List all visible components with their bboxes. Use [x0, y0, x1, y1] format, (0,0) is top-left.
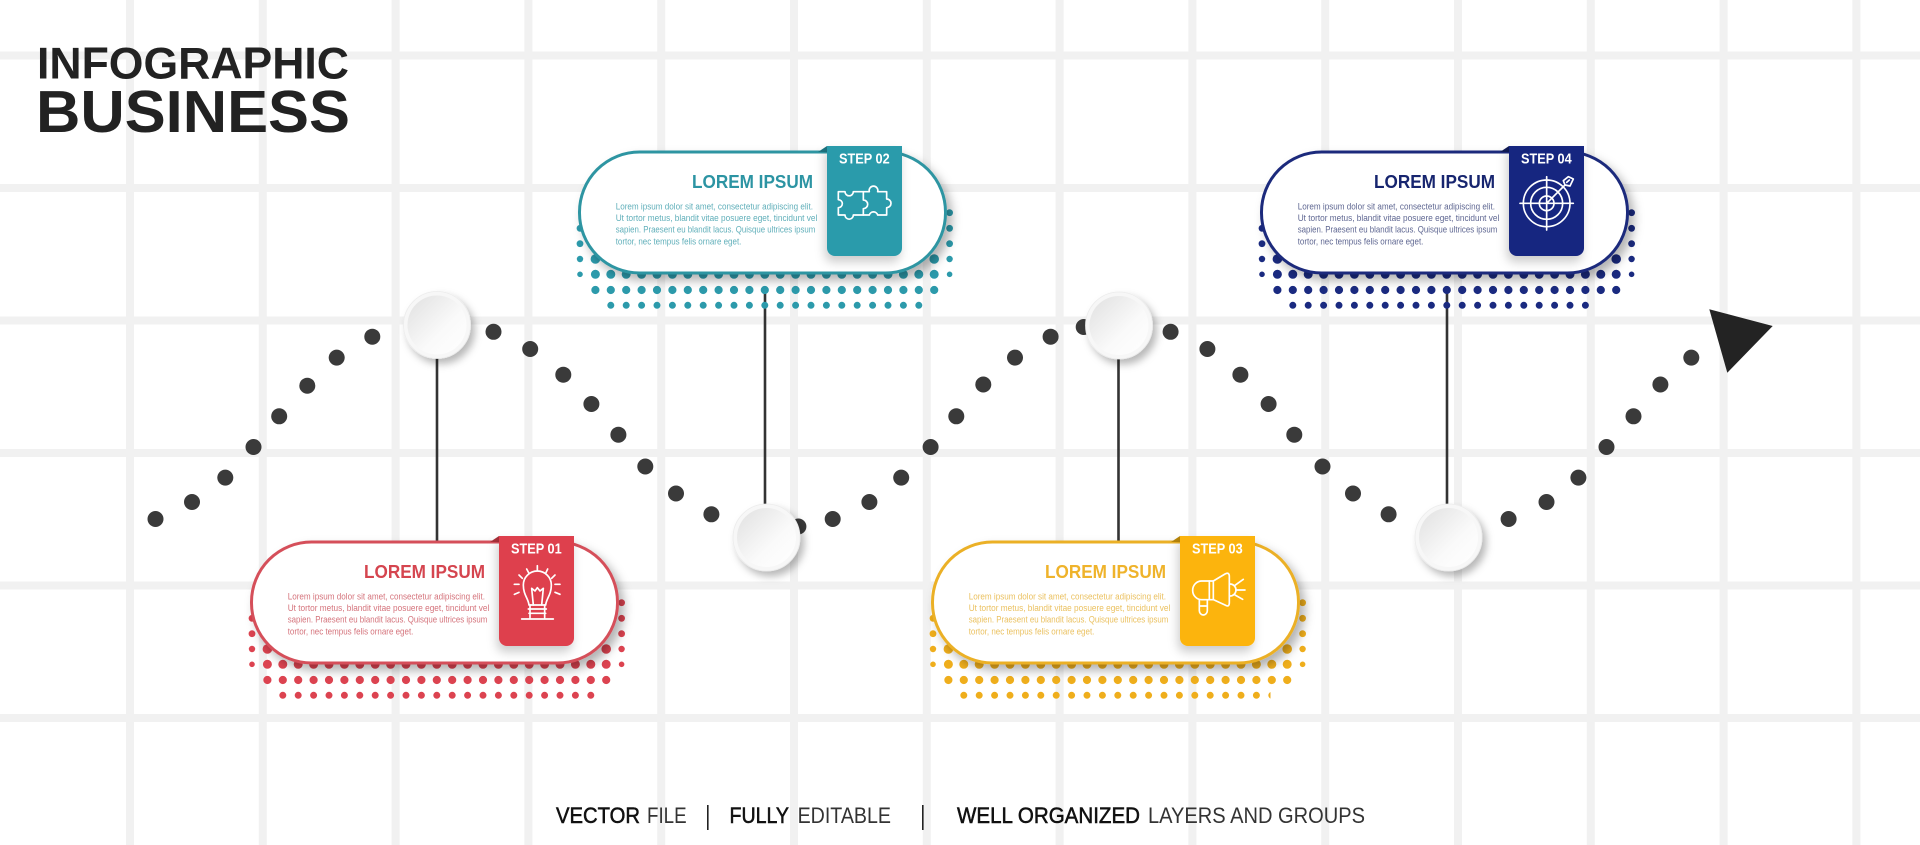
- step label: STEP 02: [839, 152, 890, 168]
- tab fold: [1171, 536, 1180, 542]
- heading: LOREM IPSUM: [364, 561, 485, 582]
- arrow head: [1709, 309, 1773, 373]
- pill outline: [580, 152, 946, 273]
- footer tagline: [556, 803, 1365, 830]
- body text: [1298, 201, 1499, 247]
- body text: sapien. Praesent eu blandit lacus. Quisque ultrices ipsum: [1298, 225, 1497, 236]
- connector lines: [437, 291, 1447, 544]
- body text: Lorem ipsum dolor sit amet, consectetur adipiscing elit.: [969, 591, 1166, 602]
- body text: tortor, nec tempus felis ornare eget.: [288, 626, 413, 637]
- body text: Ut tortor metus, blandit vitae posuere eget, tincidunt vel: [1298, 213, 1499, 224]
- body text: sapien. Praesent eu blandit lacus. Quisque ultrices ipsum: [969, 615, 1168, 626]
- body text: Lorem ipsum dolor sit amet, consectetur adipiscing elit.: [1298, 201, 1495, 212]
- halftone dots: [249, 599, 625, 695]
- footer tagline: LAYERS AND GROUPS: [1148, 803, 1365, 828]
- heading: LOREM IPSUM: [1045, 561, 1166, 582]
- body text: tortor, nec tempus felis ornare eget.: [1298, 236, 1423, 247]
- panel: step 02: [577, 146, 953, 305]
- step tab: [1509, 146, 1584, 256]
- footer tagline: FULLY: [730, 803, 789, 828]
- footer tagline: VECTOR: [556, 803, 640, 828]
- footer tagline: FILE: [647, 803, 687, 828]
- step label: STEP 03: [1192, 542, 1243, 558]
- node circle 1: [404, 292, 470, 358]
- node circle 2: [733, 504, 800, 571]
- heading: LOREM IPSUM: [692, 171, 813, 192]
- footer tagline: WELL ORGANIZED: [957, 803, 1140, 828]
- body text: [616, 201, 817, 247]
- title: [36, 39, 350, 145]
- panel: step 03: [930, 536, 1306, 695]
- body text: [288, 591, 489, 637]
- halftone dots: [930, 599, 1306, 695]
- body text: Lorem ipsum dolor sit amet, consectetur adipiscing elit.: [616, 201, 813, 212]
- step tab: [1180, 536, 1255, 646]
- footer tagline: EDITABLE: [798, 803, 891, 828]
- body text: Lorem ipsum dolor sit amet, consectetur adipiscing elit.: [288, 591, 485, 602]
- tab fold: [1500, 146, 1509, 152]
- title: INFOGRAPHIC: [37, 39, 349, 88]
- pill outline: [1262, 152, 1628, 273]
- title: BUSINESS: [36, 79, 350, 145]
- heading: LOREM IPSUM: [1374, 171, 1495, 192]
- node circle 4: [1415, 504, 1482, 571]
- step tab: [499, 536, 574, 646]
- tab fold: [490, 536, 499, 542]
- body text: tortor, nec tempus felis ornare eget.: [616, 236, 741, 247]
- dotted path: [148, 319, 1699, 534]
- node circle 3: [1086, 292, 1152, 359]
- step label: STEP 04: [1521, 152, 1572, 168]
- icon: target with arrow: [1520, 177, 1573, 230]
- halftone dots: [1259, 209, 1635, 305]
- body text: tortor, nec tempus felis ornare eget.: [969, 626, 1094, 637]
- body text: Ut tortor metus, blandit vitae posuere eget, tincidunt vel: [616, 213, 817, 224]
- body text: Ut tortor metus, blandit vitae posuere eget, tincidunt vel: [288, 603, 489, 614]
- body text: sapien. Praesent eu blandit lacus. Quisque ultrices ipsum: [288, 615, 487, 626]
- panel: step 01: [249, 536, 625, 695]
- step label: STEP 01: [511, 542, 562, 558]
- icon: megaphone: [1193, 573, 1245, 615]
- body text: [969, 591, 1170, 637]
- step tab: [827, 146, 902, 256]
- pill outline: [252, 542, 618, 663]
- body text: sapien. Praesent eu blandit lacus. Quisque ultrices ipsum: [616, 225, 815, 236]
- icon: puzzle pieces: [838, 186, 891, 219]
- halftone dots: [577, 209, 953, 305]
- panel: step 04: [1259, 146, 1635, 305]
- pill outline: [932, 542, 1298, 663]
- tab fold: [818, 146, 827, 152]
- body text: Ut tortor metus, blandit vitae posuere eget, tincidunt vel: [969, 603, 1170, 614]
- icon: light bulb: [514, 566, 560, 619]
